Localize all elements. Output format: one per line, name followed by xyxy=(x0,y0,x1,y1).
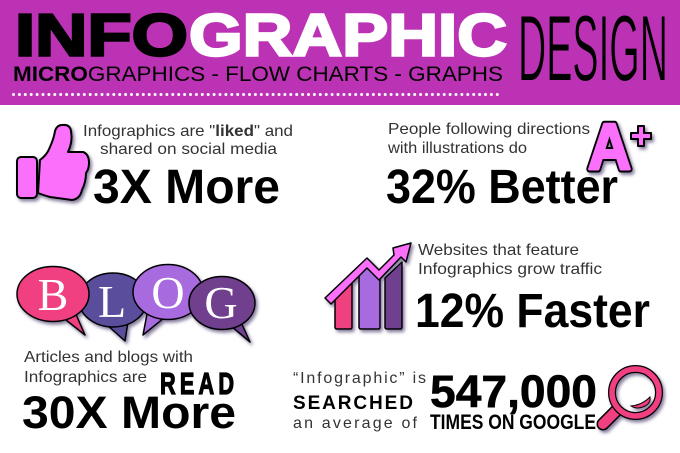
dotted line xyxy=(14,93,502,96)
letters: BLOG: L xyxy=(98,276,126,327)
panel: traffic: Infographics grow traffic xyxy=(418,261,602,278)
panel: searched xyxy=(293,366,659,434)
panel: better xyxy=(386,110,651,214)
stat: 547,000: 547,000 xyxy=(430,366,597,417)
header panel xyxy=(0,0,680,105)
text: traffic description: Websites that feature xyxy=(418,242,579,259)
panel: better: with illustrations do xyxy=(387,140,527,157)
label: SEARCHED: SEARCHED xyxy=(293,393,413,414)
panel: traffic xyxy=(325,242,650,338)
icon: thumbs up xyxy=(17,125,89,200)
text: directions description: People following directions xyxy=(388,121,590,138)
title: GRAPHIC: GRAPHIC xyxy=(189,2,507,68)
letters: BLOG: B xyxy=(38,269,68,320)
title: INFO: INFO xyxy=(15,2,188,68)
letters: BLOG xyxy=(38,267,238,328)
panel: liked: shared on social media xyxy=(100,141,277,158)
label: TIMES ON GOOGLE: TIMES ON GOOGLE xyxy=(430,411,596,434)
panel: blog xyxy=(17,264,255,438)
letters: BLOG: O xyxy=(151,267,185,318)
label: READ: READ xyxy=(160,366,238,401)
stat: 3X More: 3X More xyxy=(93,161,280,214)
chart: rising bars and arrow xyxy=(325,243,411,329)
icon: blog speech bubbles xyxy=(17,264,255,342)
panel: liked xyxy=(17,123,293,214)
icon: A plus: A xyxy=(588,110,631,183)
panel: blog: Infographics are xyxy=(24,369,147,386)
text: an average of: an average of xyxy=(293,415,418,432)
text: liked description: Infographics are " liked" and xyxy=(83,123,293,140)
text: blog description: Articles and blogs with xyxy=(24,349,193,366)
subtitle: MICROGRAPHICS - FLOW CHARTS - GRAPHS xyxy=(13,63,503,86)
icon: A plus: A xyxy=(588,110,631,183)
stat: 12% Faster: 12% Faster xyxy=(415,285,650,338)
stat: 30X More: 30X More xyxy=(22,387,236,438)
text: search description: “Infographic” is xyxy=(293,370,426,387)
letters: BLOG: G xyxy=(204,277,238,328)
icon: magnifying glass xyxy=(603,369,659,424)
stat: 32% Better: 32% Better xyxy=(386,161,618,214)
